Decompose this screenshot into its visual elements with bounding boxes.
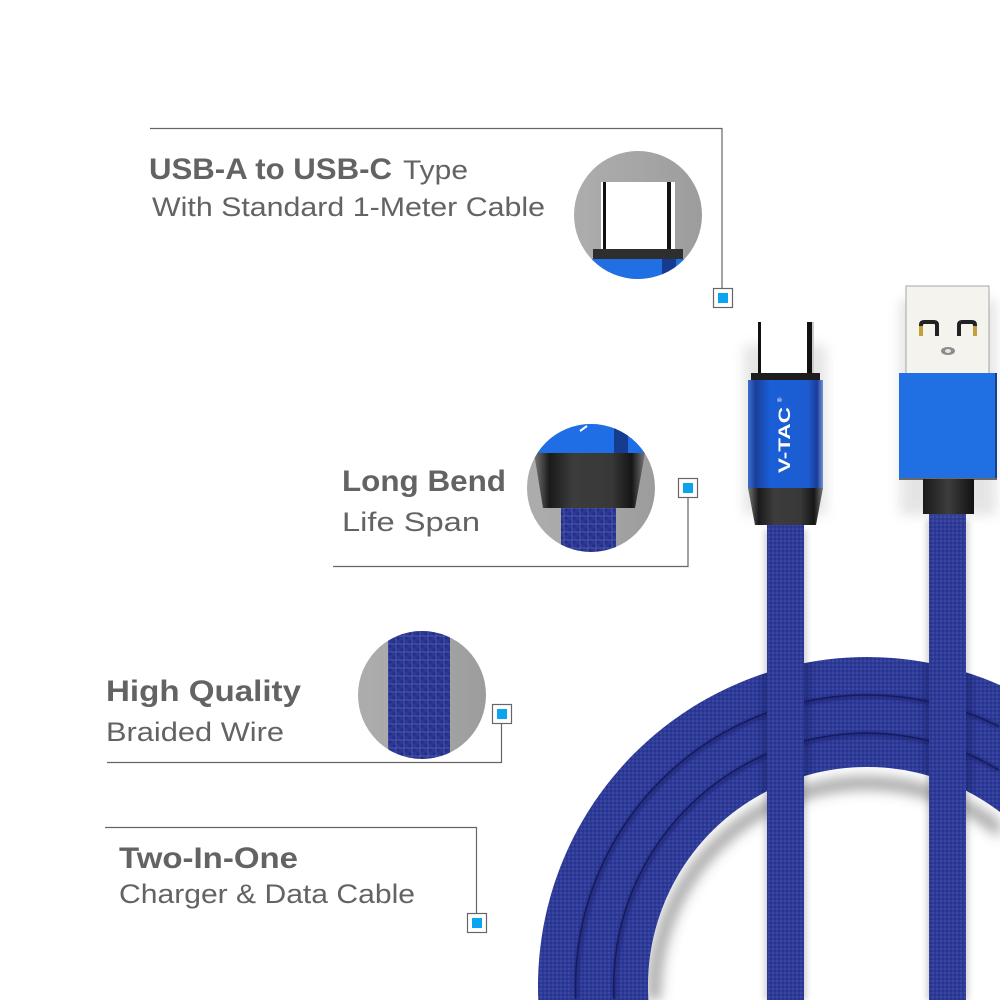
- callout 3: High Quality: [106, 631, 512, 762]
- circle: strain relief detail: [527, 424, 655, 554]
- cable shadows on background: [764, 520, 969, 1000]
- callout 2: Long Bend: [333, 424, 698, 566]
- callout 4: Two-In-One: [105, 828, 486, 932]
- heading 3: High Quality: [106, 675, 301, 708]
- callout 1: USB-A to USB-C: [149, 128, 732, 308]
- heading 2: Long Bend: [342, 465, 506, 498]
- leader line 2: [333, 498, 688, 566]
- USB-A connector: [899, 286, 997, 515]
- marker 4: [468, 914, 486, 932]
- heading 4: Two-In-One: [119, 842, 298, 875]
- sub-text 3: Braided Wire: [106, 717, 284, 747]
- leader line 1: [150, 128, 722, 289]
- marker 1: [714, 288, 732, 308]
- USB-C connector: [744, 322, 826, 525]
- heading 1: USB-A to USB-C: [149, 153, 392, 186]
- coiled braided cable: [538, 640, 1000, 1000]
- straight cable: USB-C side: [767, 520, 804, 1000]
- label: Type: Type: [403, 155, 468, 185]
- marker 3: [492, 704, 512, 724]
- sub-text 1: With Standard 1-Meter Cable: [152, 192, 545, 222]
- circle: USB-C tip detail: [574, 151, 702, 281]
- straight cable: USB-A side: [929, 510, 966, 1000]
- leader line 3: [107, 724, 502, 762]
- sub-text 4: Charger & Data Cable: [119, 879, 415, 909]
- registered mark: ®: [777, 397, 784, 402]
- sub-text 2: Life Span: [342, 507, 480, 537]
- marker 2: [678, 478, 698, 498]
- brand logo: V-TAC: [775, 407, 794, 473]
- leader line 4: [105, 828, 476, 914]
- circle: braid detail: [358, 631, 486, 759]
